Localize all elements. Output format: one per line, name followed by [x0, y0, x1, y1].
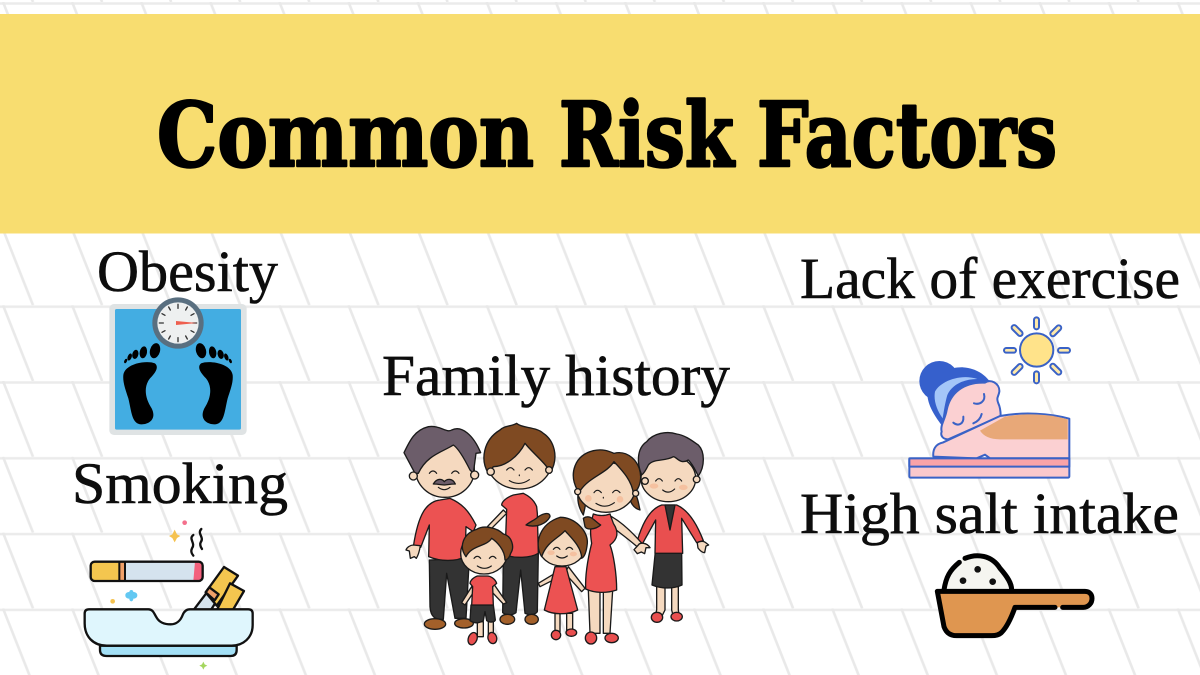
mother	[573, 450, 650, 644]
label: high salt intake: High salt intake	[800, 481, 1179, 546]
icon: sun	[1004, 317, 1070, 383]
boy	[461, 527, 513, 646]
label: obesity: Obesity	[97, 239, 278, 304]
label: smoking: Smoking	[72, 451, 288, 516]
label: lack of exercise: Lack of exercise	[800, 246, 1180, 311]
icon: salt scoop	[937, 556, 1092, 636]
title: Common	[157, 82, 534, 187]
grandfather	[404, 426, 481, 629]
title: Factors	[757, 82, 1057, 187]
grandmother	[637, 433, 709, 622]
girl	[526, 514, 601, 640]
icon: family illustration	[404, 423, 709, 646]
father	[484, 423, 555, 624]
title: Risk	[559, 82, 736, 187]
label: family history: Family history	[382, 343, 730, 408]
icon: person lying down	[909, 361, 1069, 478]
title banner	[0, 14, 1200, 234]
icon: bathroom scale	[109, 297, 247, 435]
icon: ashtray with cigarettes	[85, 520, 253, 670]
